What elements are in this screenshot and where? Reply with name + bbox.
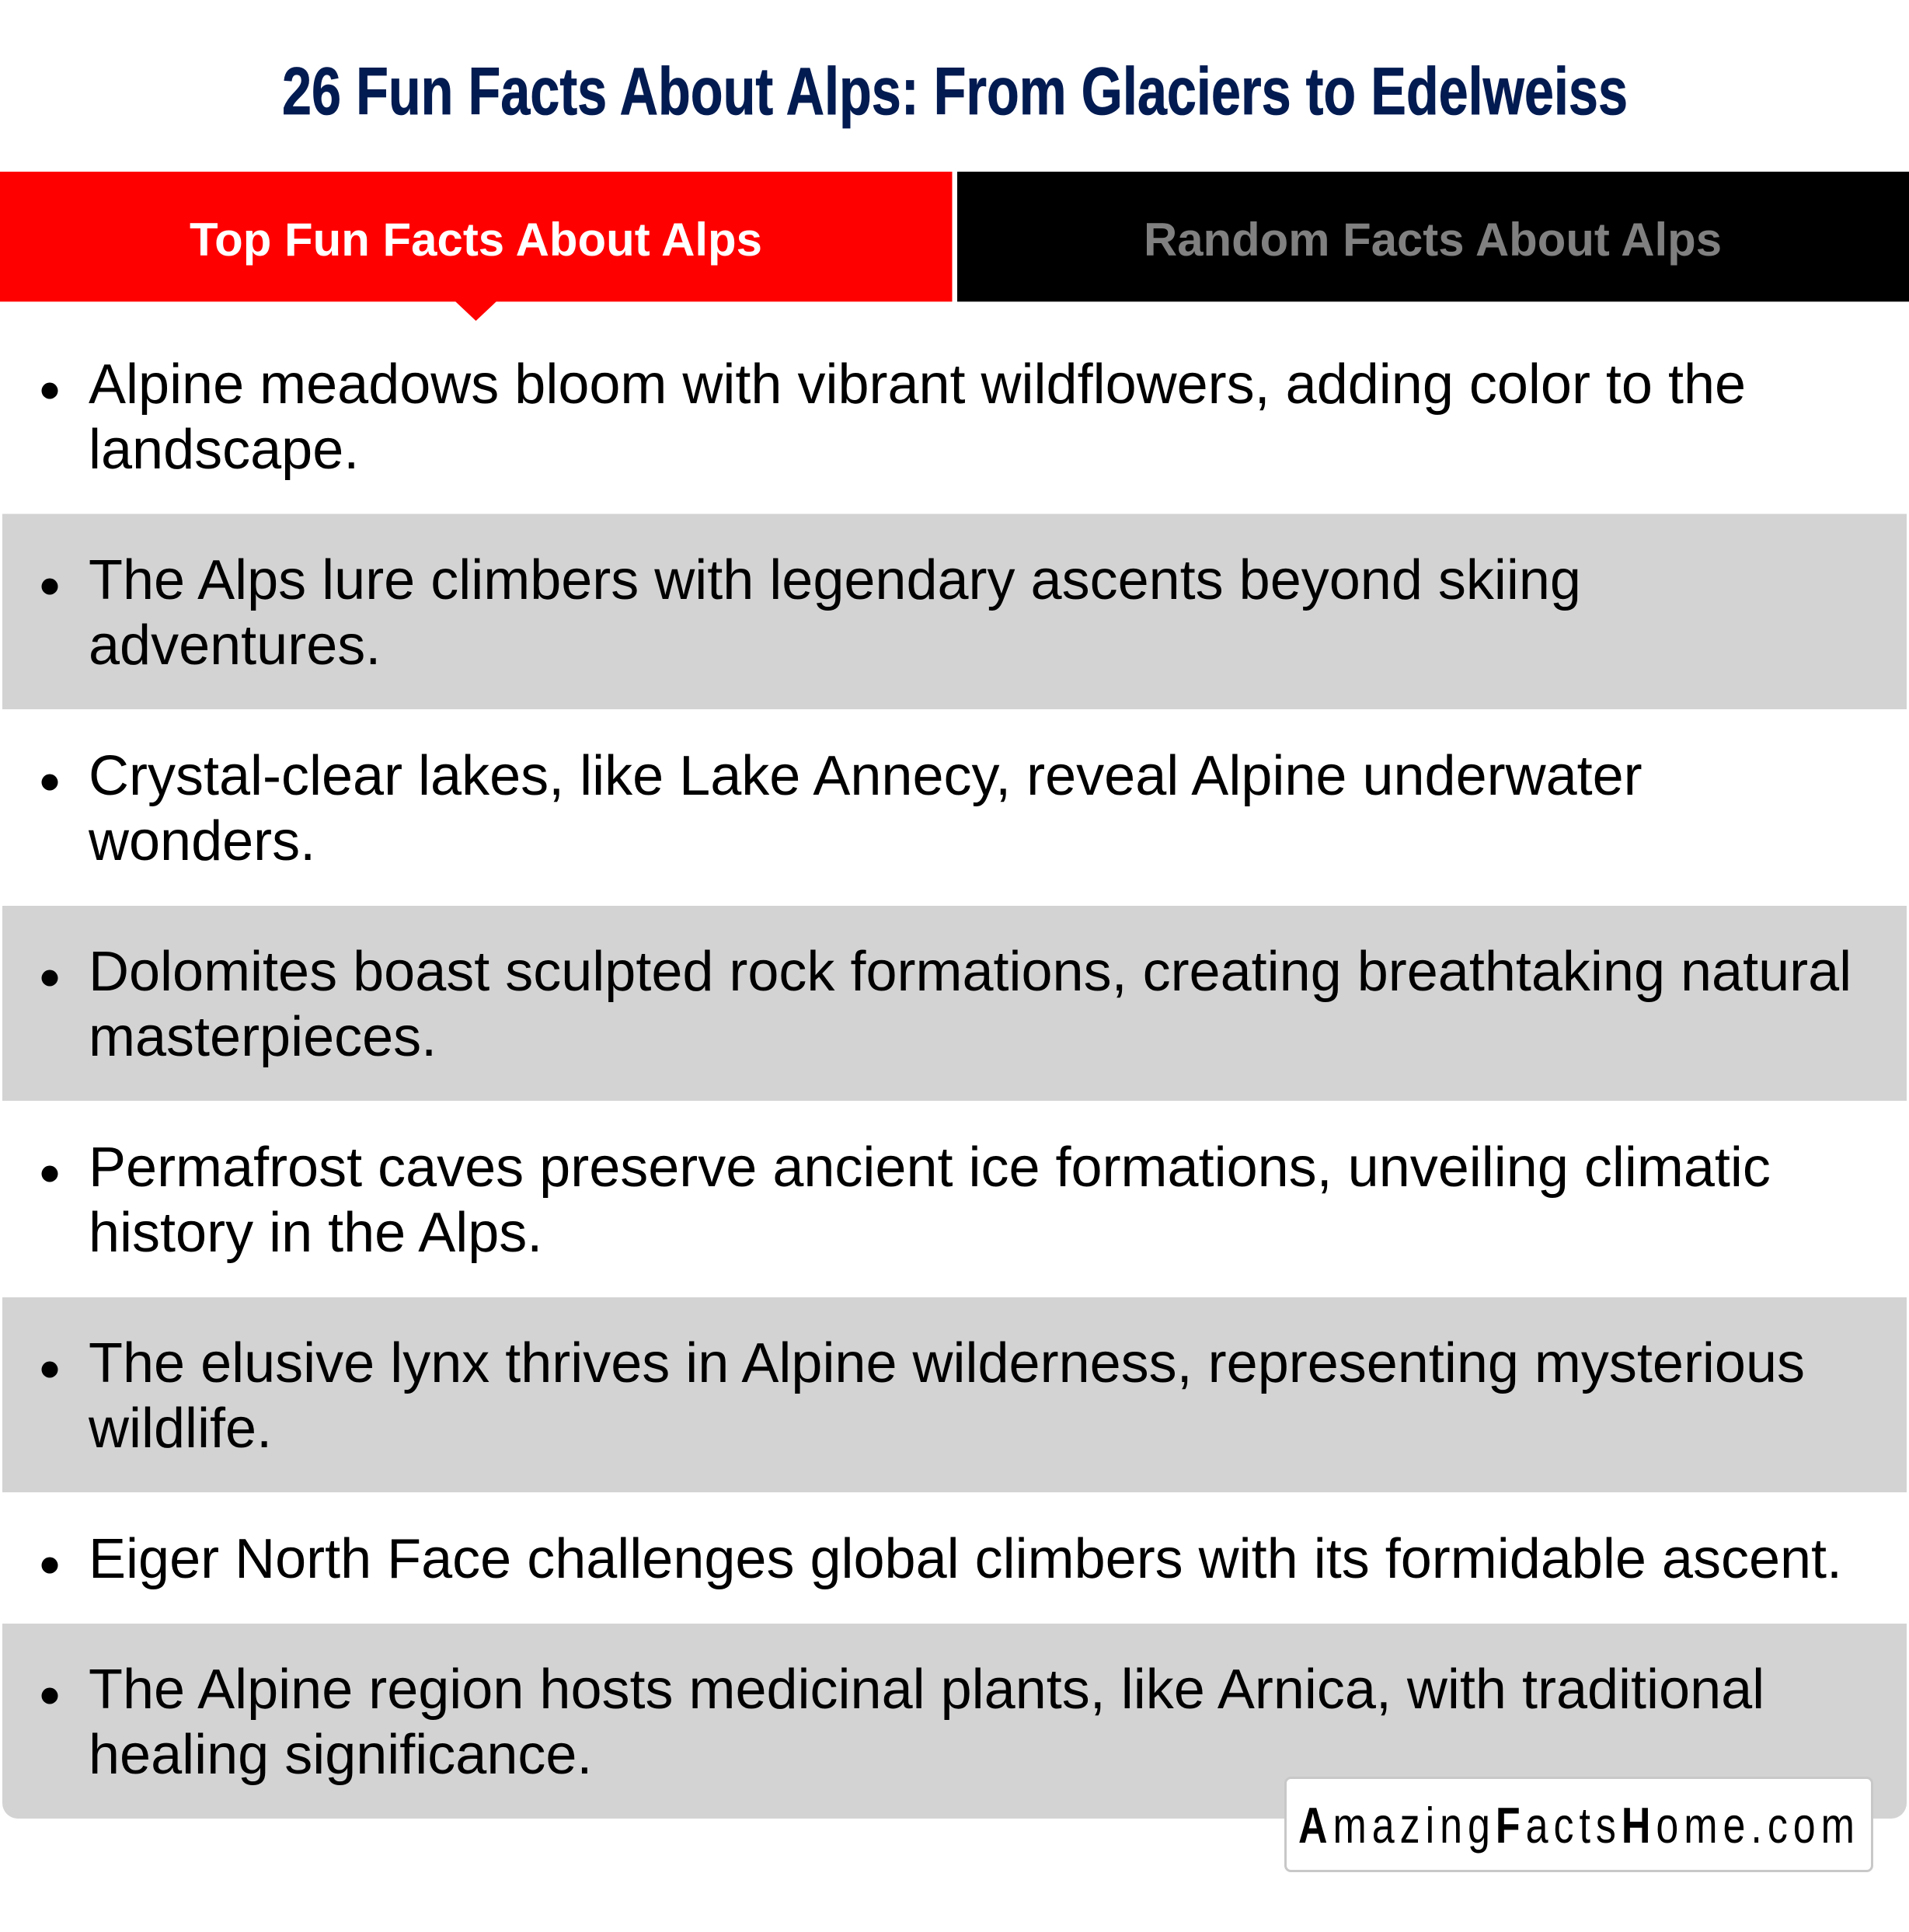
fact row 1 [42, 353, 1746, 481]
fact row 6: wildlife. [88, 1398, 272, 1460]
tab pointer [455, 301, 496, 321]
fact row 4: masterpieces. [89, 1006, 437, 1068]
fact row 4 [2, 906, 1907, 1101]
fact row 1: landscape. [89, 419, 359, 481]
fact row 6 [2, 1297, 1907, 1492]
tab label: top fun facts: Top Fun Facts About Alps [190, 214, 762, 266]
fact row 6: The elusive lynx thrives in Alpine wilderness, representing mysterious [89, 1332, 1805, 1394]
fact row 8 [2, 1624, 1907, 1819]
fact row 5: history in the Alps. [89, 1202, 542, 1264]
fact row 3: Crystal-clear lakes, like Lake Annecy, reveal Alpine underwater [89, 745, 1643, 807]
fact row 8: healing significance. [89, 1724, 592, 1786]
tab: random facts (inactive) [957, 172, 1909, 301]
fact row 5 [42, 1137, 1771, 1264]
fact row 7: Eiger North Face challenges global climbers with its formidable ascent. [89, 1528, 1842, 1590]
tab: top fun facts (active) [0, 172, 953, 321]
fact row 4: Dolomites boast sculpted rock formations, creating breathtaking natural [89, 941, 1852, 1003]
fact row 1: Alpine meadows bloom with vibrant wildflowers, adding color to the [89, 353, 1746, 416]
fact row 8: The Alpine region hosts medicinal plants, like Arnica, with traditional [89, 1659, 1764, 1721]
fact row 2 [2, 514, 1907, 709]
fact row 2: The Alps lure climbers with legendary ascents beyond skiing [89, 549, 1581, 611]
fact row 3 [42, 745, 1643, 872]
fact row 5: Permafrost caves preserve ancient ice formations, unveiling climatic [89, 1137, 1771, 1199]
fact row 3: wonders. [88, 810, 315, 872]
watermark badge [1285, 1777, 1872, 1871]
watermark text: AmazingFactsHome.com [1298, 1798, 1860, 1854]
tab label: random facts: Random Facts About Alps [1144, 214, 1722, 266]
fact row 2: adventures. [89, 614, 381, 677]
